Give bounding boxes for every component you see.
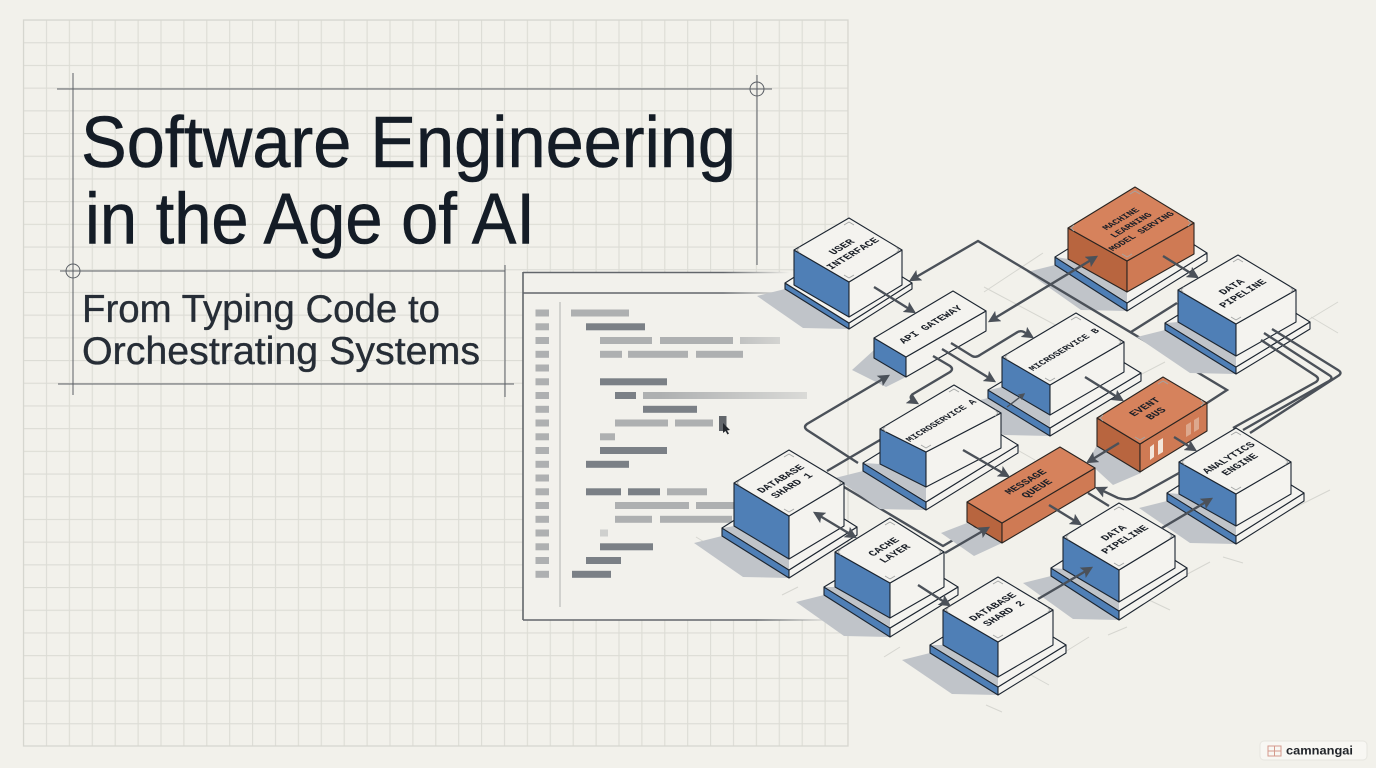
subtitle: Orchestrating Systems bbox=[82, 330, 480, 373]
box: message queue: QUEUE bbox=[1019, 478, 1056, 500]
box: microservice a bbox=[835, 385, 1018, 510]
subtitle bbox=[82, 288, 480, 373]
connectors: analytics and data pipeline to message queue bbox=[1088, 473, 1179, 506]
box: event bus: BUS bbox=[1144, 406, 1170, 422]
text cursor and pointer bbox=[719, 416, 730, 434]
box: machine learning model serving: LEARNING bbox=[1108, 211, 1156, 240]
triple connector: data pipeline to analytics bbox=[1233, 329, 1340, 433]
box: database shard 1 bbox=[694, 450, 857, 578]
title bbox=[81, 103, 736, 260]
box: data pipeline lower: PIPELINE bbox=[1099, 524, 1153, 556]
box: microservice a: MICROSERVICE A bbox=[903, 398, 980, 444]
box: data pipeline upper: DATA bbox=[1217, 277, 1249, 297]
box: cache layer bbox=[796, 518, 958, 637]
box: database shard 1: SHARD 1 bbox=[769, 472, 817, 501]
box: database shard 2: SHARD 2 bbox=[981, 600, 1029, 629]
box: data pipeline upper: PIPELINE bbox=[1217, 278, 1271, 310]
box: database shard 2 bbox=[902, 577, 1066, 695]
connector: main loop to user interface bbox=[911, 241, 1227, 403]
watermark badge bbox=[1260, 741, 1367, 760]
box: cache layer: CACHE bbox=[866, 536, 903, 559]
code editor window bbox=[523, 272, 848, 620]
code lines bbox=[571, 310, 807, 578]
box: database shard 1: DATABASE bbox=[755, 463, 808, 495]
box: api gateway: API GATEWAY bbox=[897, 304, 967, 346]
subtitle: From Typing Code to bbox=[82, 288, 440, 331]
icon: open book bbox=[1268, 746, 1281, 756]
title: Software Engineering bbox=[81, 103, 736, 183]
title frame lines bbox=[57, 73, 772, 397]
box: event bus: EVENT bbox=[1127, 396, 1164, 419]
box: machine learning model serving: MACHINE bbox=[1100, 206, 1143, 232]
box: event bus bbox=[1088, 377, 1207, 485]
line number gutter bbox=[536, 310, 549, 578]
box: data pipeline lower: DATA bbox=[1099, 523, 1131, 543]
title: in the Age of AI bbox=[85, 180, 535, 260]
box: database shard 2: DATABASE bbox=[967, 591, 1020, 623]
box: analytics engine bbox=[1139, 428, 1304, 544]
box: user interface: INTERFACE bbox=[824, 236, 883, 272]
box: microservice b bbox=[960, 313, 1141, 436]
box: cache layer: LAYER bbox=[877, 543, 915, 565]
box: user interface bbox=[757, 218, 912, 329]
box: machine learning model serving: MODEL SERVING bbox=[1106, 210, 1178, 253]
box: user interface: USER bbox=[827, 237, 859, 257]
box: machine learning model serving bbox=[1027, 187, 1207, 311]
arrows between components bbox=[815, 256, 1211, 605]
box: data pipeline lower bbox=[1023, 503, 1187, 620]
box: analytics engine: ENGINE bbox=[1220, 452, 1262, 478]
box: microservice b: MICROSERVICE B bbox=[1026, 327, 1103, 373]
box: message queue bbox=[941, 447, 1095, 556]
box: api gateway bbox=[852, 291, 986, 387]
box: message queue: MESSAGE bbox=[1003, 468, 1051, 497]
watermark text: camnangai bbox=[1286, 746, 1353, 758]
connectors: left loop and database links bbox=[805, 376, 982, 546]
box: analytics engine: ANALYTICS bbox=[1200, 441, 1259, 476]
box: data pipeline upper bbox=[1137, 255, 1310, 374]
